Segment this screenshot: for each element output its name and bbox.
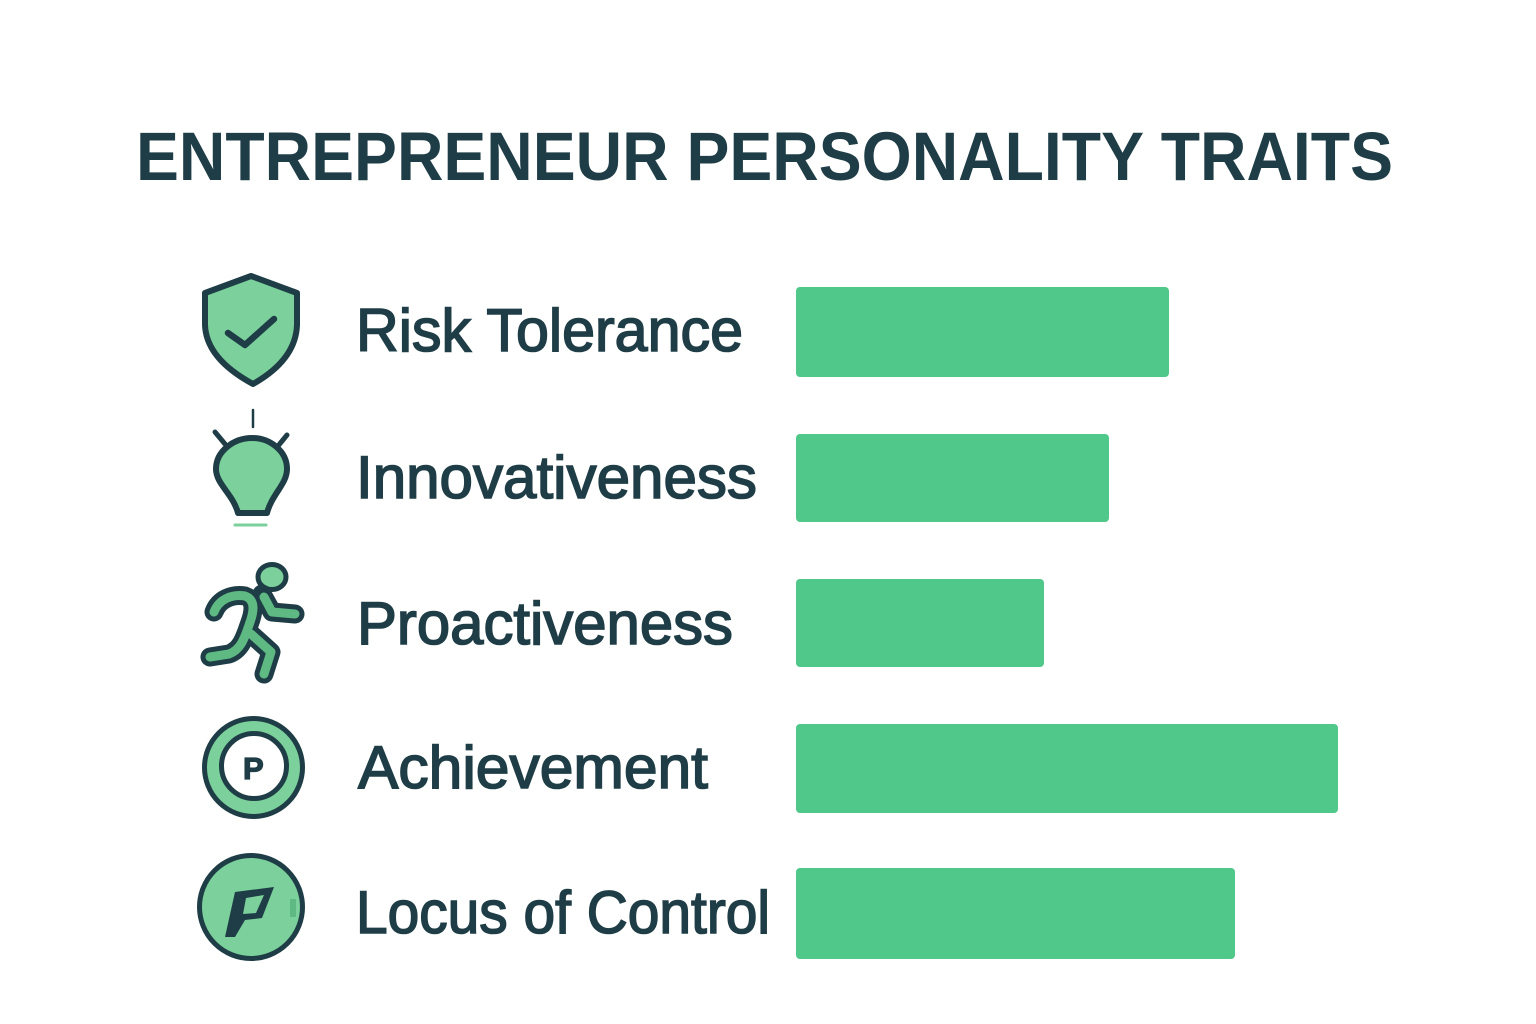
label: Innovativeness: Innovativeness — [356, 444, 757, 511]
icon: shield with check — [205, 276, 297, 384]
bar: Achievement — [796, 724, 1338, 813]
icon: light bulb — [215, 410, 287, 525]
title: ENTREPRENEUR PERSONALITY TRAITS — [136, 118, 1393, 195]
label: Achievement: Achievement — [358, 734, 708, 801]
icon: P ring badge: P — [243, 751, 264, 786]
bar: Risk Tolerance — [796, 287, 1169, 377]
label: Risk Tolerance: Risk Tolerance — [356, 297, 743, 364]
label: Locus of Control: Locus of Control — [356, 879, 770, 946]
icon: running person — [210, 564, 295, 674]
bar: Proactiveness — [796, 579, 1044, 667]
label: Proactiveness: Proactiveness — [357, 590, 733, 657]
icon: P ring badge — [204, 718, 302, 816]
bar: Locus of Control — [796, 868, 1235, 959]
icon: flag badge — [200, 856, 302, 958]
bar: Innovativeness — [796, 434, 1109, 522]
